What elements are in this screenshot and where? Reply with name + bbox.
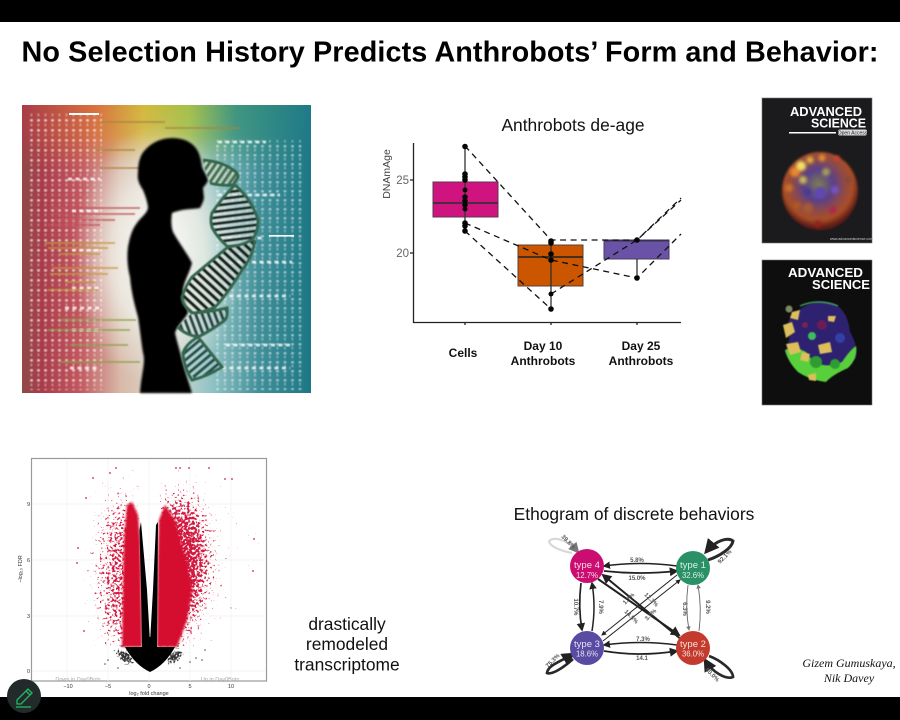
node: type 1: 32.6% (682, 571, 704, 580)
journal cover: Advanced Science open access: www.advancedscience.com (830, 237, 873, 241)
edge percentage labels: 9.2% (704, 600, 710, 614)
dark fringe of non-significant points (112, 650, 186, 664)
bottom black bar (0, 697, 900, 720)
edge percentage labels: 75.3% (545, 653, 562, 669)
caption: drastically remodeled transcriptome: remodeled (306, 634, 388, 654)
volcano axis labels: log₂ fold change (129, 691, 169, 697)
edge percentage labels: 39.8% (560, 534, 576, 551)
cover image: orange and purple anthrobot (782, 152, 858, 230)
journal cover: Advanced Science open access: SCIENCE (811, 116, 866, 130)
volcano plot: 0 (147, 684, 151, 690)
node: type 2: type 2 (680, 639, 706, 650)
icon: pencil button (7, 679, 41, 713)
node: type 4: type 4 (574, 560, 600, 571)
volcano axes ticks (27, 502, 30, 675)
volcano plot: Up in Day0Bots (201, 677, 239, 683)
journal cover: Advanced Science (762, 260, 872, 405)
journal cover: Advanced Science: SCIENCE (812, 277, 870, 292)
edge percentage labels: 6.3% (681, 602, 687, 616)
box plot: DNAmAge (381, 143, 681, 368)
credits: Nik Davey (823, 671, 875, 685)
volcano plot: −log₁₀ FDR (18, 555, 24, 583)
edge percentage labels: 12.3% (643, 592, 659, 609)
x axis labels: Anthrobots (609, 354, 674, 368)
volcano axes ticks: 6 (27, 558, 30, 564)
volcano axes ticks: 9 (27, 502, 30, 508)
panel: silhouette and DNA illustration (22, 105, 311, 393)
edge percentage labels: 14.1 (636, 656, 648, 662)
journal cover: Advanced Science open access: Open Access (838, 130, 868, 136)
icon: DNA helix (175, 155, 265, 383)
solid red significant band (122, 502, 192, 647)
edge percentage labels: 10.7% (572, 598, 578, 616)
x axis labels: Day 25 (622, 339, 661, 353)
edge percentage labels: 1.7% (622, 592, 637, 606)
volcano plot: 5 (188, 684, 192, 690)
edge percentage labels: 14.5% (623, 609, 639, 626)
node: type 2: 36.0% (682, 650, 704, 658)
credits: Gizem Gumuskaya, (802, 656, 896, 670)
edges between behaviour types (580, 564, 700, 654)
x axis labels: Day 10 (524, 339, 563, 353)
volcano plot annotations: Down in Day0Bots (55, 677, 101, 683)
top black bar (0, 0, 900, 22)
node: type 1: type 1 (680, 560, 706, 571)
box: Day 10 Anthrobots (518, 245, 583, 286)
volcano axes ticks: 3 (27, 614, 30, 620)
node: type 4 (570, 549, 604, 583)
volcano plot (18, 458, 266, 697)
node: type 3: type 3 (574, 639, 600, 650)
volcano plot: −10 (63, 684, 73, 690)
node: type 1 (676, 551, 710, 585)
node: type 3 (570, 631, 604, 665)
title: No Selection History Predicts Anthrobots’ Form and Behavior: (22, 36, 878, 68)
edge percentage labels: 5.8% (630, 558, 644, 564)
edge percentage labels: 7.3% (636, 637, 650, 643)
box: Day 25 Anthrobots (604, 240, 669, 259)
journal cover: Advanced Science: ADVANCED (788, 265, 863, 280)
volcano plot: −5 (105, 684, 111, 690)
icon: human silhouette (127, 138, 208, 393)
volcano axes ticks: 0 (27, 669, 30, 675)
volcano plot: 10 (228, 684, 234, 690)
scattered significant points (77, 468, 254, 647)
x axis labels: Anthrobots (511, 354, 576, 368)
node: type 2 (676, 631, 710, 665)
caption: drastically remodeled transcriptome: drastically (308, 614, 386, 634)
edge percentage labels: 80.0% (704, 667, 720, 684)
y axis ticks: 20 (396, 248, 409, 260)
y axis ticks (396, 175, 409, 260)
edge percentage labels: 92.1% (717, 549, 734, 565)
data points (462, 144, 640, 312)
y axis label: DNAmAge (381, 149, 393, 199)
x axis labels (449, 339, 674, 368)
x axis labels: Cells (449, 346, 478, 360)
chart title: Anthrobots de-age: Anthrobots de-age (501, 115, 645, 135)
edge percentage labels: 3.0% (644, 608, 659, 622)
journal cover: Advanced Science open access: ADVANCED (790, 105, 862, 119)
box: Cells (433, 182, 498, 217)
journal cover: Advanced Science open access (762, 98, 873, 243)
node: type 4: 12.7% (576, 571, 598, 580)
dashed connecting lines (465, 146, 681, 309)
chart title: ethogram: Ethogram of discrete behaviors (514, 504, 755, 524)
node: type 3: 18.6% (576, 650, 598, 658)
edge percentage labels: 15.0% (628, 576, 646, 582)
cover image: green and purple anthrobot (783, 302, 856, 382)
edge percentage labels (545, 534, 734, 684)
self loops (547, 539, 733, 678)
network diagram: ethogram (545, 534, 734, 684)
black non-significant points (125, 522, 175, 672)
caption: drastically remodeled transcriptome: transcriptome (294, 654, 400, 674)
edge percentage labels: 7.9% (597, 600, 603, 614)
y axis ticks: 25 (396, 175, 409, 187)
whiskers (465, 146, 637, 309)
